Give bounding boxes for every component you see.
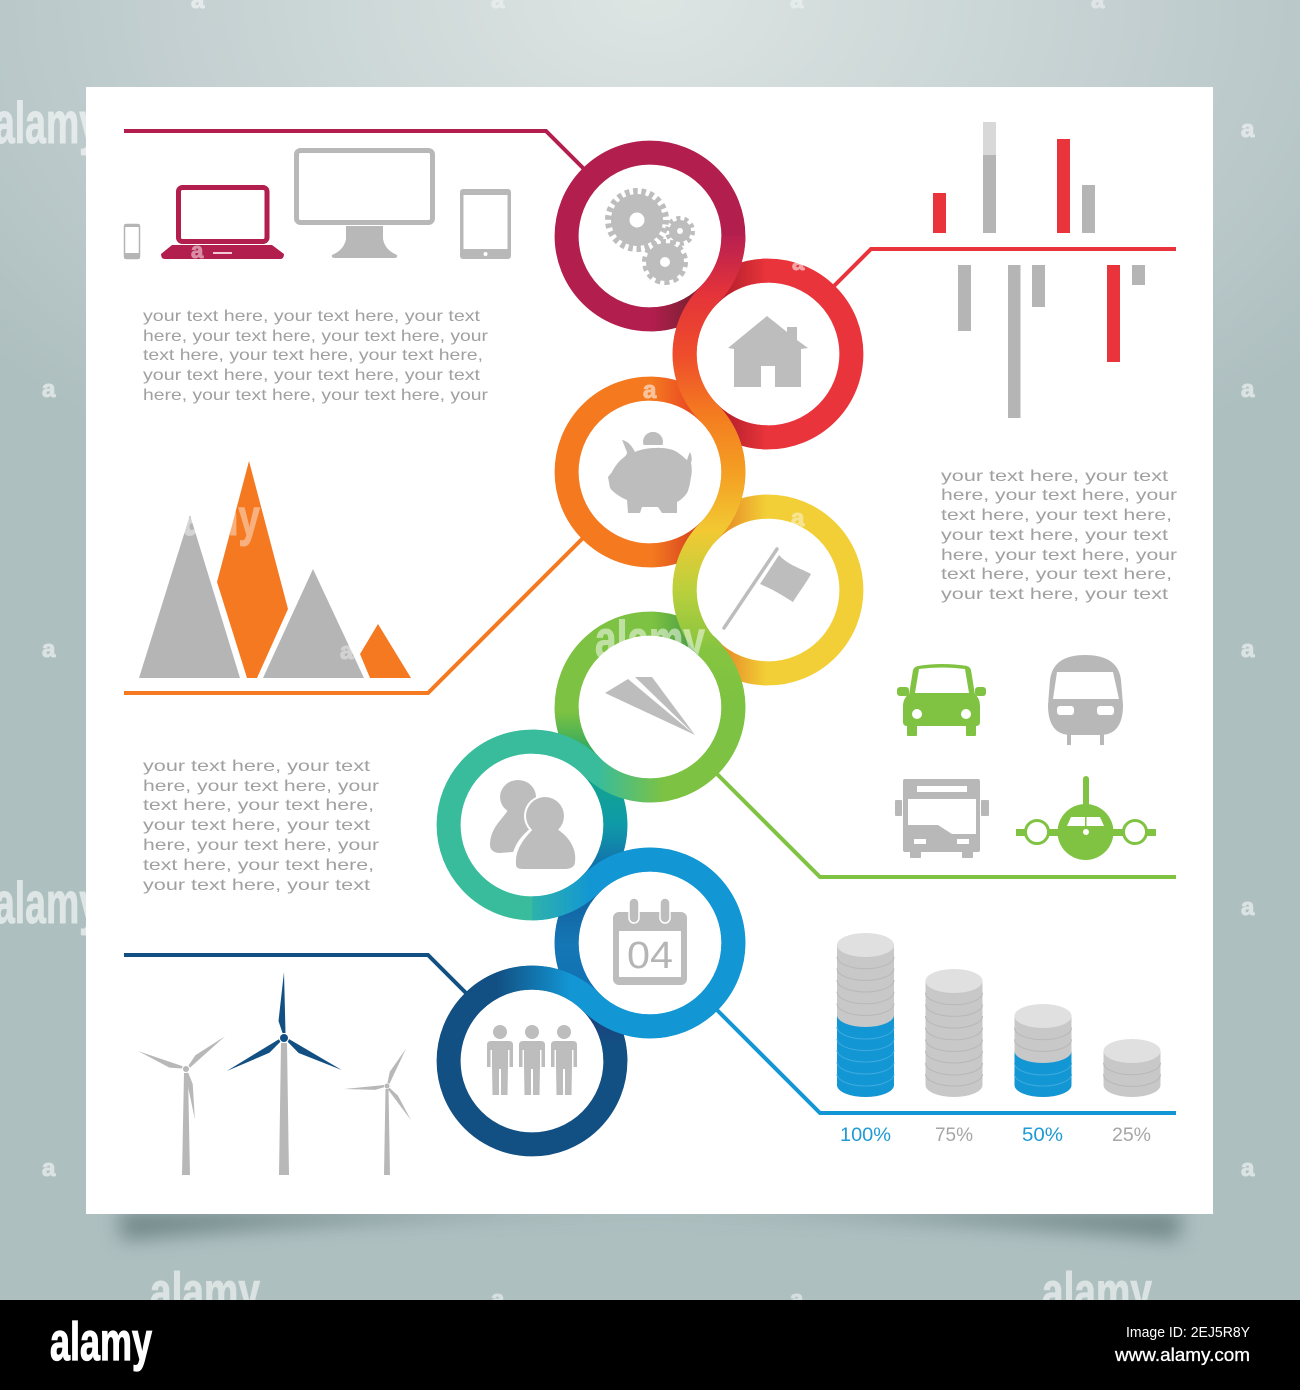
footer url: www.alamy.com [1114, 1345, 1250, 1365]
text block: lower left: here, your text here, your [143, 778, 380, 795]
connector line: orange [124, 537, 584, 693]
icon: paper plane [605, 677, 695, 735]
icon: calendar [613, 898, 687, 985]
icon: car [897, 664, 986, 736]
ring 6 teal [449, 742, 615, 908]
icon: airplane [1016, 776, 1156, 860]
connector line: red [833, 249, 1176, 287]
ring watermarks: a [791, 505, 805, 532]
text block: right: here, your text here, your [941, 547, 1178, 564]
text block: right: text here, your text here, [941, 507, 1172, 524]
icon: three standing people [487, 1025, 577, 1095]
text block: right: here, your text here, your [941, 487, 1178, 504]
ring 3 orange [567, 389, 733, 555]
background watermarks: a [790, 1286, 804, 1313]
icon: piggy bank [608, 432, 692, 513]
mountain chart: a [340, 638, 354, 665]
ring 2 red [685, 271, 851, 437]
background watermarks: a [1241, 894, 1255, 921]
panel shadow [118, 1212, 1182, 1240]
background watermarks: a [1241, 1155, 1255, 1182]
coin stacks chart [837, 933, 1160, 1097]
turbine center [226, 972, 342, 1175]
turbine right [344, 1047, 414, 1175]
text block: lower left: here, your text here, your [143, 837, 380, 854]
icon: flag [724, 549, 811, 628]
icon: phone [124, 224, 140, 259]
text block: top left: text here, your text here, your text here, [143, 347, 483, 364]
text block: lower left: your text here, your text [143, 817, 371, 834]
background watermarks: a [42, 636, 56, 663]
turbine left [137, 1033, 226, 1175]
wind turbines [137, 972, 414, 1175]
icon: house [728, 316, 808, 387]
background watermarks: a [42, 376, 56, 403]
ring 1 crimson [567, 153, 733, 319]
stack 25% [1104, 1039, 1160, 1097]
ring 8 navy [449, 978, 615, 1144]
icon: laptop: a [191, 238, 204, 263]
icon: calendar: 04 [627, 935, 673, 977]
connector line: blue [716, 1009, 1176, 1113]
text block: lower left: your text here, your text [143, 877, 371, 894]
percent labels [840, 1124, 1151, 1146]
text block: right [941, 468, 1178, 603]
mountain chart: alamy [150, 489, 260, 547]
icon: monitor [296, 150, 432, 258]
icon: two people [490, 780, 580, 875]
interlocked ring chain [449, 153, 851, 1144]
stack 100% [837, 933, 894, 1097]
stack 75% [926, 969, 982, 1097]
icon: laptop [161, 188, 284, 263]
icon: train [1048, 655, 1123, 745]
footer logo: alamy [50, 1312, 152, 1372]
background watermarks: a [1241, 116, 1255, 143]
text block: right: your text here, your text [941, 527, 1169, 544]
text block: lower left: text here, your text here, [143, 857, 374, 874]
text block: right: your text here, your text [941, 468, 1169, 485]
ring watermarks [595, 250, 805, 669]
percent labels: 100% [840, 1124, 891, 1146]
text block: top left: your text here, your text here, your text [143, 367, 481, 384]
text block: lower left: your text here, your text [143, 758, 371, 775]
white panel [86, 87, 1213, 1214]
connector line: crimson [124, 131, 585, 170]
ribbon: blue to navy [473, 978, 650, 1026]
ribbon: green to teal [532, 707, 733, 790]
text block: right: text here, your text here, [941, 566, 1172, 583]
text block: top left: here, your text here, your text here, your [143, 328, 489, 345]
connector line: green [716, 773, 1176, 877]
ring watermarks: a [643, 377, 657, 404]
ring watermarks: a [792, 250, 805, 275]
ring 7 blue [567, 860, 733, 1026]
background watermarks: a [1241, 636, 1255, 663]
text block: lower left: text here, your text here, [143, 797, 374, 814]
percent labels: 75% [935, 1124, 973, 1146]
text block: lower left [143, 758, 380, 894]
text block: top left [143, 308, 489, 404]
devices row [124, 150, 511, 263]
footer image id: Image ID: 2EJ5R8Y [1126, 1324, 1250, 1341]
background watermarks: a [1241, 376, 1255, 403]
text block: top left: your text here, your text here, your text [143, 308, 481, 325]
ribbon: crimson to green [685, 236, 733, 707]
text block: right: your text here, your text [941, 586, 1169, 603]
ring 4 yellow [685, 507, 851, 673]
background watermarks: alamy [150, 1262, 260, 1322]
background watermarks: a [42, 1155, 56, 1182]
ring watermarks: alamy [595, 611, 705, 669]
icon: tablet [460, 189, 511, 259]
icon: bus [895, 779, 989, 858]
background watermarks: a [491, 1286, 505, 1313]
ring 5 green [567, 624, 733, 790]
bar chart: up and down bars [933, 122, 1145, 418]
stack 50% [1014, 1004, 1072, 1097]
mountain chart [139, 461, 411, 678]
footer bar [0, 1300, 1300, 1390]
percent labels: 25% [1112, 1124, 1151, 1146]
icon: gears [609, 192, 692, 282]
background watermarks: alamy [1042, 1262, 1152, 1322]
text block: top left: here, your text here, your text here, your [143, 387, 489, 404]
connector line: navy [124, 955, 468, 995]
ribbon: teal to blue [532, 860, 733, 1026]
percent labels: 50% [1022, 1124, 1063, 1146]
